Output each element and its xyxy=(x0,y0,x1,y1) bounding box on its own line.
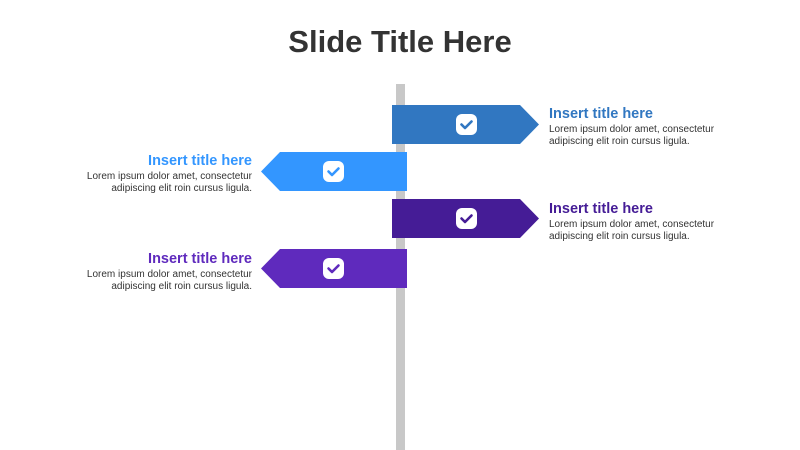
text 4: Lorem ipsum dolor amet, consectetur xyxy=(87,269,253,280)
title: Slide Title Here xyxy=(288,24,512,59)
text 2 xyxy=(87,153,253,194)
text 1: adipiscing elit roin cursus ligula. xyxy=(549,136,690,147)
sign 4 xyxy=(261,249,407,288)
text 2: Lorem ipsum dolor amet, consectetur xyxy=(87,171,253,182)
text 2: adipiscing elit roin cursus ligula. xyxy=(111,183,252,194)
sign 1 xyxy=(392,105,539,144)
sign 3 xyxy=(392,199,539,238)
text 1: Insert title here xyxy=(549,106,653,122)
text 3: Lorem ipsum dolor amet, consectetur xyxy=(549,219,715,230)
text 4: Insert title here xyxy=(148,251,252,267)
icon: check 1 xyxy=(456,114,477,135)
text 2: Insert title here xyxy=(148,153,252,169)
text 1 xyxy=(549,106,715,147)
text 1: Lorem ipsum dolor amet, consectetur xyxy=(549,124,715,135)
text 4 xyxy=(87,251,253,292)
text 3: adipiscing elit roin cursus ligula. xyxy=(549,231,690,242)
icon: check 3 xyxy=(456,208,477,229)
sign 2 xyxy=(261,152,407,191)
text 3 xyxy=(549,201,715,242)
text 4: adipiscing elit roin cursus ligula. xyxy=(111,281,252,292)
icon: check 2 xyxy=(323,161,344,182)
icon: check 4 xyxy=(323,258,344,279)
pole xyxy=(396,84,405,450)
text 3: Insert title here xyxy=(549,201,653,217)
